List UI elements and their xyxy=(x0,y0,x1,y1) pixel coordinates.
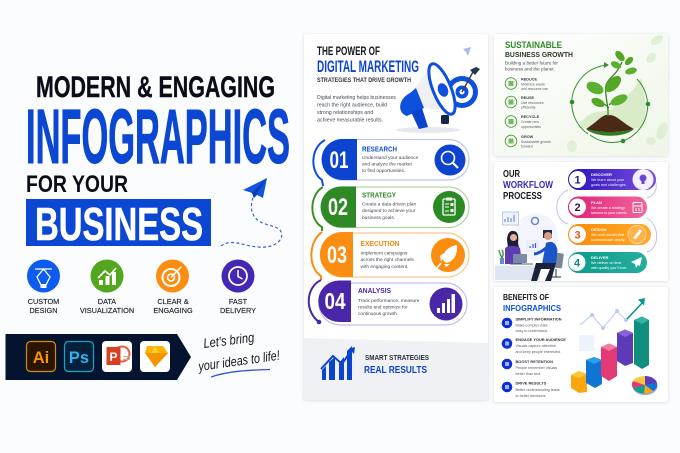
step 01 research: 01 xyxy=(330,147,348,174)
step 2 plan: PLAN xyxy=(591,200,602,205)
panel: sustainable growth: BUSINESS GROWTH xyxy=(505,50,573,59)
heading: the power of: THE POWER OF xyxy=(317,46,380,58)
benefits list: SIMPLIFY INFORMATION xyxy=(516,316,562,322)
intro: Building a better future for xyxy=(505,60,558,66)
intro text: Digital marketing helps businesses xyxy=(317,95,396,101)
list items: and resource use xyxy=(521,87,548,91)
step 3 design: DESIGN xyxy=(591,227,606,232)
feature: data visualization: DATA xyxy=(98,297,116,306)
list items: REUSE xyxy=(521,96,535,100)
chart: pie xyxy=(632,376,658,395)
icon: sketch xyxy=(140,341,170,372)
panel: benefits of infographics xyxy=(494,287,668,402)
icon: rocket xyxy=(431,238,465,272)
feature: clear and engaging xyxy=(153,260,193,315)
heading: BENEFITS OF xyxy=(503,292,549,302)
feature: fast delivery xyxy=(220,260,256,315)
heading: PROCESS xyxy=(503,191,542,202)
step 04 analysis: ANALYSIS xyxy=(358,286,391,295)
step 2 plan: tailored to your needs. xyxy=(591,211,628,215)
step 4 deliver: DELIVER xyxy=(591,255,608,260)
step 03 execution: EXECUTION xyxy=(360,239,400,248)
heading xyxy=(503,292,561,313)
chart: 3d bars with trend xyxy=(571,298,649,393)
step 4 deliver: We deliver on time xyxy=(591,261,621,265)
illustration: plant in growth ring xyxy=(570,49,650,143)
feature: clear and engaging: CLEAR & xyxy=(157,297,189,306)
intro xyxy=(505,60,558,72)
list items: Sustainable growth xyxy=(521,140,551,144)
step 02 strategy: business goals. xyxy=(362,215,395,221)
benefits list: to better decisions. xyxy=(516,394,546,398)
list items: RECYCLE xyxy=(521,115,540,119)
step 3 design: We craft visuals that xyxy=(591,233,624,237)
icon: magnifier xyxy=(434,144,466,176)
step 4 deliver: with quality you'll love. xyxy=(591,266,627,270)
step 1 discover: DISCOVER xyxy=(591,172,612,177)
step 1 discover: We learn about your xyxy=(591,178,625,182)
icon: bars xyxy=(430,288,462,320)
benefits list: Visuals capture attention xyxy=(516,344,556,348)
benefits list: Better understanding leads xyxy=(516,388,560,392)
step 03 execution: 03 xyxy=(327,242,347,269)
step 02 strategy: 02 xyxy=(328,194,348,221)
intro text: strong relationships and xyxy=(317,110,373,116)
benefits list: and keep people interested. xyxy=(516,350,561,354)
text: INFOGRAPHICS xyxy=(26,94,290,180)
icon: lightbulb xyxy=(632,169,654,190)
benefits list xyxy=(502,316,566,398)
illustration: two people at a desk xyxy=(495,212,564,281)
icon: powerpoint: P xyxy=(109,350,118,364)
illustration: megaphone and target xyxy=(396,47,480,133)
step 04 analysis: 04 xyxy=(324,288,346,314)
step 01 research: RESEARCH xyxy=(362,144,397,154)
icon: calendar xyxy=(633,202,642,212)
panel: digital marketing xyxy=(304,34,488,400)
heading: business banner: BUSINESS xyxy=(35,198,203,250)
main title block xyxy=(26,71,290,250)
step 02 strategy: STRATEGY xyxy=(362,190,396,200)
panel: sustainable growth xyxy=(494,33,670,156)
list items: Minimize waste xyxy=(521,82,545,86)
feature: custom design xyxy=(27,260,60,315)
step 01 research xyxy=(322,139,469,180)
list items xyxy=(505,78,551,148)
benefits list: better than text. xyxy=(516,372,541,376)
intro: business and the planet. xyxy=(505,66,555,72)
step 3 design: communicate clearly. xyxy=(591,238,625,242)
icon: clipboard xyxy=(433,191,465,223)
step 2 plan: We create a strategy xyxy=(591,206,625,210)
icon: illustrator: Ai xyxy=(33,349,49,367)
icon: illustrator xyxy=(26,342,56,372)
list items: REDUCE xyxy=(521,78,538,82)
handwritten tagline xyxy=(197,330,281,377)
step 04 analysis: results and optimize for xyxy=(358,304,408,310)
list items: GROW xyxy=(521,135,534,139)
heading: WORKFLOW xyxy=(503,180,553,191)
step 02 strategy xyxy=(320,186,469,228)
curved connectors xyxy=(309,140,325,322)
benefits list: Make complex data xyxy=(516,324,548,328)
intro text: achieve measurable results. xyxy=(317,118,383,124)
step 01 research: and analyze the market xyxy=(362,162,413,168)
step 3 design: 3 xyxy=(574,230,581,242)
heading: for your: FOR YOUR xyxy=(26,171,128,198)
step 03 execution: across the right channels xyxy=(360,257,414,263)
feature: custom design: CUSTOM xyxy=(28,297,59,306)
benefits list: DRIVE RESULTS xyxy=(516,380,547,386)
decorative leaves xyxy=(567,33,670,152)
icon: send xyxy=(631,257,642,268)
intro text: reach the right audience, build xyxy=(317,102,387,108)
icon: paper plane with dashed trail xyxy=(221,178,282,247)
step 04 analysis: Track performance, measure xyxy=(358,298,420,304)
heading: SUSTAINABLE xyxy=(505,40,562,51)
list items: opportunities xyxy=(521,125,541,129)
panel: workflow process xyxy=(494,162,668,281)
step 02 strategy: designed to achieve your xyxy=(362,208,416,214)
step 04 analysis xyxy=(318,280,467,325)
step 1 discover: goals and challenges. xyxy=(591,183,627,187)
step 4 deliver xyxy=(568,252,647,273)
handwritten tagline: Let's bring xyxy=(203,330,255,351)
step 1 discover: 1 xyxy=(574,174,581,186)
benefits list: BOOST RETENTION xyxy=(516,359,553,364)
list items: Use resources xyxy=(521,101,544,105)
footer text xyxy=(364,353,429,376)
step 2 plan xyxy=(568,196,647,218)
icon: photoshop: Ps xyxy=(69,349,89,367)
connector curves xyxy=(557,177,657,252)
benefits list: easy to understand. xyxy=(516,329,548,333)
heading: digital marketing: DIGITAL MARKETING xyxy=(317,57,419,76)
step 01 research: to find opportunities. xyxy=(362,168,405,174)
footer text: REAL RESULTS xyxy=(364,364,427,376)
icon: growth chart xyxy=(321,346,355,380)
list items: Create new xyxy=(521,120,539,124)
heading: INFOGRAPHICS xyxy=(503,303,561,313)
feature: fast delivery: FAST xyxy=(229,297,248,306)
list items: forward xyxy=(521,144,533,148)
icon: powerpoint xyxy=(102,341,132,372)
step 1 discover xyxy=(568,169,656,190)
footer band xyxy=(304,338,488,400)
icon: photoshop xyxy=(64,342,94,372)
footer text: SMART STRATEGIES xyxy=(365,353,429,362)
step 02 strategy: Create a data-driven plan xyxy=(362,202,416,208)
heading xyxy=(503,169,553,202)
banner: software tools xyxy=(6,334,191,380)
feature: data visualization xyxy=(80,260,134,315)
step 2 plan: 2 xyxy=(574,202,581,214)
icon: pen tool xyxy=(628,226,646,244)
step 04 analysis: continuous growth. xyxy=(358,311,398,317)
feature: fast delivery: DELIVERY xyxy=(220,306,256,315)
step 03 execution: Implement campaigns xyxy=(360,250,408,256)
step 03 execution: with engaging content. xyxy=(360,264,409,270)
feature: data visualization: VISUALIZATION xyxy=(80,306,134,315)
step 4 deliver: 4 xyxy=(574,258,581,270)
subheading: STRATEGIES THAT DRIVE GROWTH xyxy=(317,77,411,84)
end dot xyxy=(317,320,321,324)
intro text xyxy=(317,95,396,124)
heading: modern and engaging: MODERN & ENGAGING xyxy=(36,71,275,104)
step 3 design xyxy=(568,224,651,245)
feature: clear and engaging: ENGAGING xyxy=(153,306,193,315)
benefits list: ENGAGE YOUR AUDIENCE xyxy=(516,337,566,342)
feature: custom design: DESIGN xyxy=(30,306,57,315)
step 01 research: Understand your audience xyxy=(362,155,419,161)
list items: efficiently xyxy=(521,106,536,110)
heading: OUR xyxy=(503,169,521,180)
benefits list: People remember visuals xyxy=(516,366,557,370)
step 03 execution xyxy=(320,232,469,277)
handwritten tagline: your ideas to life! xyxy=(197,348,281,374)
